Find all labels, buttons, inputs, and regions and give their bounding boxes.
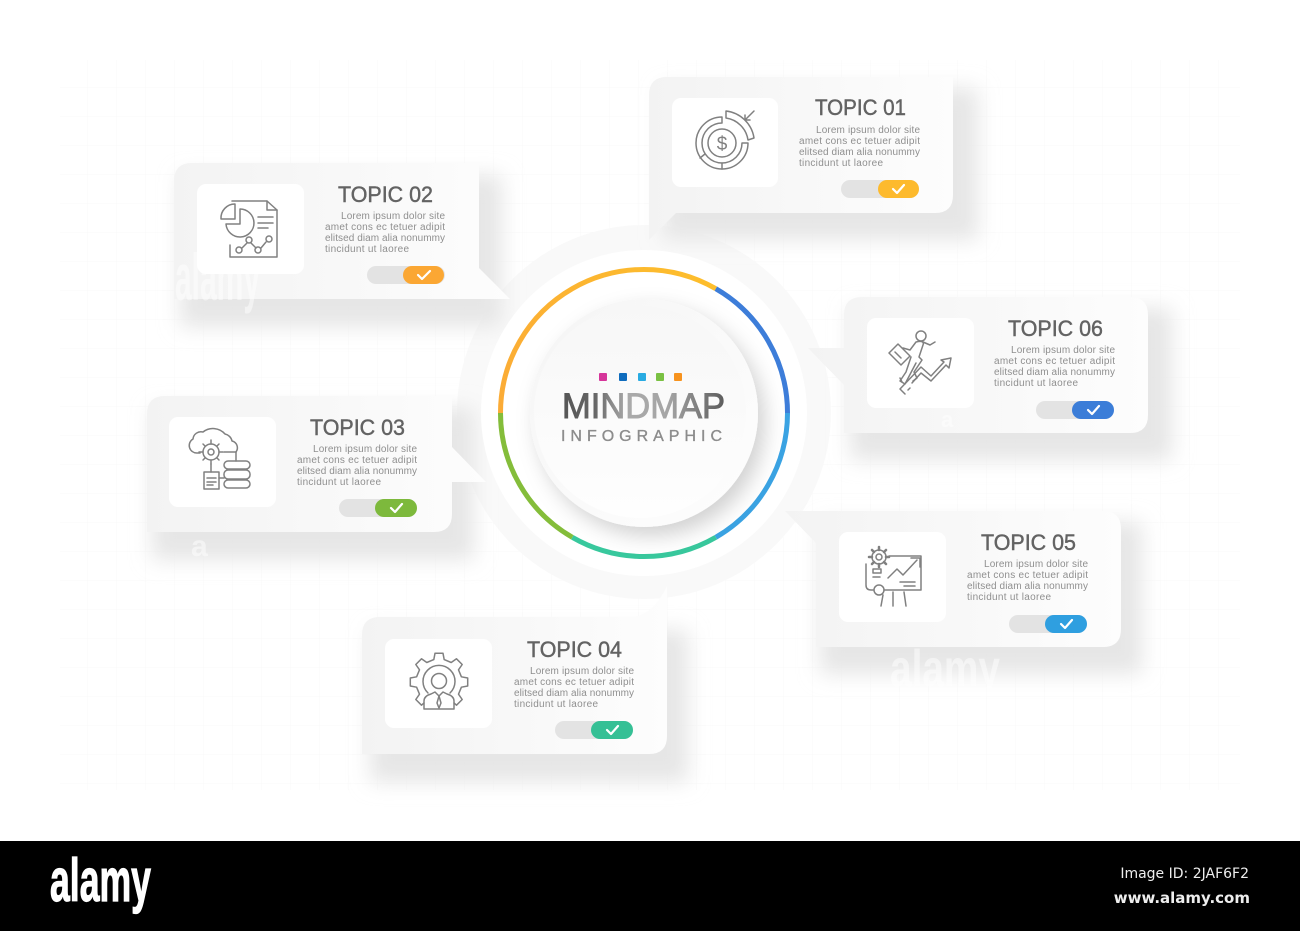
image id: Image ID: 2JAF6F2 — [1120, 866, 1249, 882]
body text: tincidunt ut laoree — [325, 244, 409, 255]
card shadow — [662, 88, 978, 240]
body text: tincidunt ut laoree — [967, 592, 1051, 603]
toggle — [555, 721, 633, 739]
card shadow — [180, 175, 502, 327]
outer pale ring — [457, 225, 831, 599]
watermark: a — [191, 530, 208, 563]
body text: elitsed diam alia nonummy — [799, 147, 920, 158]
card shadow — [370, 630, 688, 782]
toggle — [367, 266, 445, 284]
body text: tincidunt ut laoree — [994, 378, 1078, 389]
body text: Lorem ipsum dolor site — [341, 211, 445, 222]
body text — [325, 211, 445, 255]
title: TOPIC 02 — [338, 182, 433, 207]
body text: Lorem ipsum dolor site — [313, 444, 417, 455]
body text: tincidunt ut laoree — [799, 158, 883, 169]
icon: gear person — [410, 653, 468, 709]
body text: elitsed diam alia nonummy — [967, 581, 1088, 592]
toggle — [1036, 401, 1114, 419]
card shadow — [152, 408, 474, 560]
watermark — [175, 240, 1000, 698]
centre title: MINDMAP — [562, 387, 725, 426]
body text — [967, 559, 1088, 603]
icon tile — [385, 639, 492, 728]
panel: topic 03 — [147, 396, 486, 560]
icon tile — [197, 184, 304, 274]
panel: topic 01 — [649, 77, 978, 240]
dollar sign: $ — [717, 134, 728, 155]
body text: amet cons ec tetuer adipit — [514, 677, 634, 688]
icon: report — [221, 201, 277, 257]
body text: tincidunt ut laoree — [514, 699, 598, 710]
centre subtitle: INFOGRAPHIC — [561, 428, 722, 445]
body text: elitsed diam alia nonummy — [325, 233, 445, 244]
title: TOPIC 05 — [981, 530, 1076, 555]
watermark: alamy — [890, 640, 1000, 698]
toggle — [1009, 615, 1087, 633]
panel: topic 06 — [808, 297, 1172, 460]
card shadow — [820, 522, 1142, 674]
body text — [297, 444, 417, 488]
body text: amet cons ec tetuer adipit — [297, 455, 417, 466]
footer logo: alamy — [50, 847, 151, 914]
body text: amet cons ec tetuer adipit — [799, 136, 920, 147]
body text: Lorem ipsum dolor site — [530, 666, 634, 677]
title: TOPIC 06 — [1008, 316, 1103, 341]
body text: Lorem ipsum dolor site — [1011, 345, 1115, 356]
body text: tincidunt ut laoree — [297, 477, 381, 488]
title: TOPIC 03 — [310, 415, 405, 440]
body text: elitsed diam alia nonummy — [994, 367, 1115, 378]
body text: amet cons ec tetuer adipit — [967, 570, 1088, 581]
panel: topic 05 — [785, 511, 1142, 674]
icon: running businessman — [889, 331, 951, 394]
centre disc — [530, 299, 758, 527]
toggle — [339, 499, 417, 517]
icon tile — [672, 98, 778, 187]
card body — [808, 297, 1148, 433]
website: www.alamy.com — [1114, 889, 1250, 907]
disc face — [534, 306, 746, 518]
card body — [785, 511, 1121, 647]
panel: topic 02 — [174, 163, 510, 327]
colour squares — [599, 373, 682, 381]
title: TOPIC 01 — [815, 95, 906, 120]
body text — [994, 345, 1115, 389]
white ring zone — [481, 250, 807, 576]
card body — [362, 586, 667, 754]
icon: presentation board — [866, 547, 921, 606]
icon tile — [867, 318, 974, 408]
watermark: alamy — [175, 240, 260, 314]
body text: Lorem ipsum dolor site — [984, 559, 1088, 570]
footer bar — [0, 841, 1300, 931]
body text: amet cons ec tetuer adipit — [325, 222, 445, 233]
panel: topic 04 — [362, 586, 688, 782]
body text: Lorem ipsum dolor site — [816, 125, 920, 136]
body text — [799, 125, 920, 169]
disc base — [530, 299, 758, 527]
icon: cloud data — [189, 429, 250, 489]
card body — [174, 163, 510, 299]
card shadow — [850, 308, 1172, 460]
body text: elitsed diam alia nonummy — [514, 688, 634, 699]
card body — [147, 396, 486, 532]
toggle — [841, 180, 919, 198]
body text — [514, 666, 634, 710]
icon: dollar target — [696, 111, 754, 169]
icon tile — [839, 532, 946, 622]
watermark: a — [941, 407, 954, 432]
card body — [649, 77, 953, 240]
coloured ring — [500, 269, 788, 557]
icon tile — [169, 417, 276, 507]
body text: amet cons ec tetuer adipit — [994, 356, 1115, 367]
title: TOPIC 04 — [527, 637, 622, 662]
body text: elitsed diam alia nonummy — [297, 466, 417, 477]
